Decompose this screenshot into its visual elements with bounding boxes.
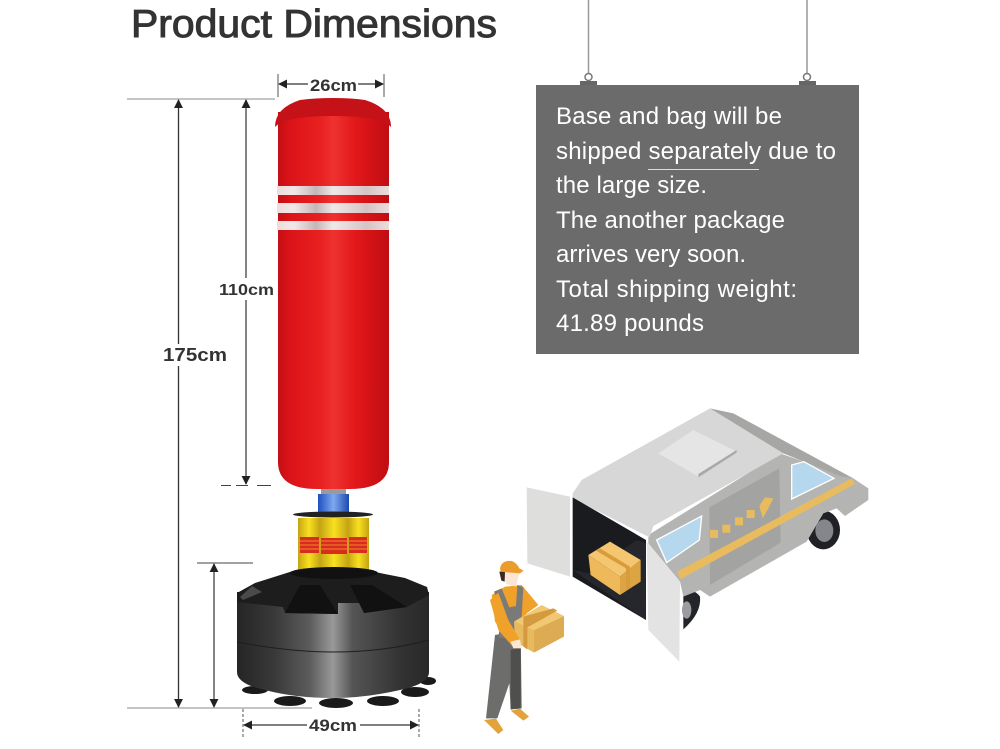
title: Product Dimensions bbox=[131, 3, 497, 46]
reflective stripes bbox=[277, 186, 389, 230]
cargo opening bbox=[573, 497, 646, 620]
dimension: 49cm base width bbox=[243, 709, 419, 738]
delivery van bbox=[527, 408, 868, 662]
sign panel bbox=[536, 85, 859, 354]
sign text: the large size. bbox=[556, 172, 707, 199]
van side bbox=[648, 453, 868, 597]
base feet bbox=[242, 677, 436, 708]
right rear door bbox=[647, 542, 680, 662]
sign cords and clips bbox=[580, 0, 816, 86]
dimension: 110cm bag height: 110cm bbox=[219, 282, 274, 299]
roof hatch bbox=[658, 430, 737, 477]
dashed arrow on panel bbox=[710, 497, 773, 538]
left rear door bbox=[527, 487, 570, 577]
head bbox=[503, 571, 520, 587]
rear side window bbox=[657, 516, 702, 563]
sign text: shipped separately due to bbox=[556, 138, 836, 165]
dimension: 175cm total height: 175cm bbox=[163, 345, 227, 365]
van roof bbox=[573, 408, 783, 537]
cargo box bbox=[588, 542, 641, 595]
overalls bbox=[494, 585, 523, 640]
dimension: 175cm total height bbox=[127, 99, 312, 708]
rear wheel bbox=[682, 591, 700, 629]
base top bbox=[237, 571, 429, 614]
legs bbox=[486, 630, 522, 718]
yellow spring columns bbox=[298, 518, 369, 572]
dimension: 110cm bag height bbox=[218, 100, 276, 486]
blue post bbox=[318, 494, 349, 515]
dimension: 49cm base width: 49cm bbox=[309, 717, 357, 735]
base body bbox=[237, 592, 429, 698]
arm bbox=[490, 593, 520, 647]
cap bbox=[500, 561, 524, 573]
yellow stripe bbox=[677, 478, 855, 579]
sign text: 41.89 pounds bbox=[556, 310, 704, 337]
hanging sign bbox=[536, 0, 859, 354]
sign text: Base and bag will be bbox=[556, 103, 782, 130]
bag cap bbox=[275, 98, 391, 127]
spring plate bbox=[293, 512, 373, 518]
dimension: 26cm bag width: 26cm bbox=[310, 77, 357, 95]
torso orange bbox=[492, 585, 538, 639]
side panel bbox=[709, 468, 781, 585]
cab window bbox=[792, 462, 834, 499]
sign text: arrives very soon. bbox=[556, 241, 746, 268]
held box bbox=[514, 605, 564, 653]
dimension: 26cm bag width bbox=[278, 74, 384, 97]
punching bag bbox=[237, 98, 436, 708]
sign text: Total shipping weight: bbox=[556, 276, 797, 303]
front wheel bbox=[807, 511, 840, 549]
sign text: The another package bbox=[556, 207, 785, 234]
dimension: base height bbox=[197, 563, 253, 707]
sign text bbox=[556, 103, 836, 337]
shoes bbox=[484, 709, 529, 734]
delivery worker bbox=[484, 561, 564, 734]
bag body bbox=[278, 112, 389, 489]
